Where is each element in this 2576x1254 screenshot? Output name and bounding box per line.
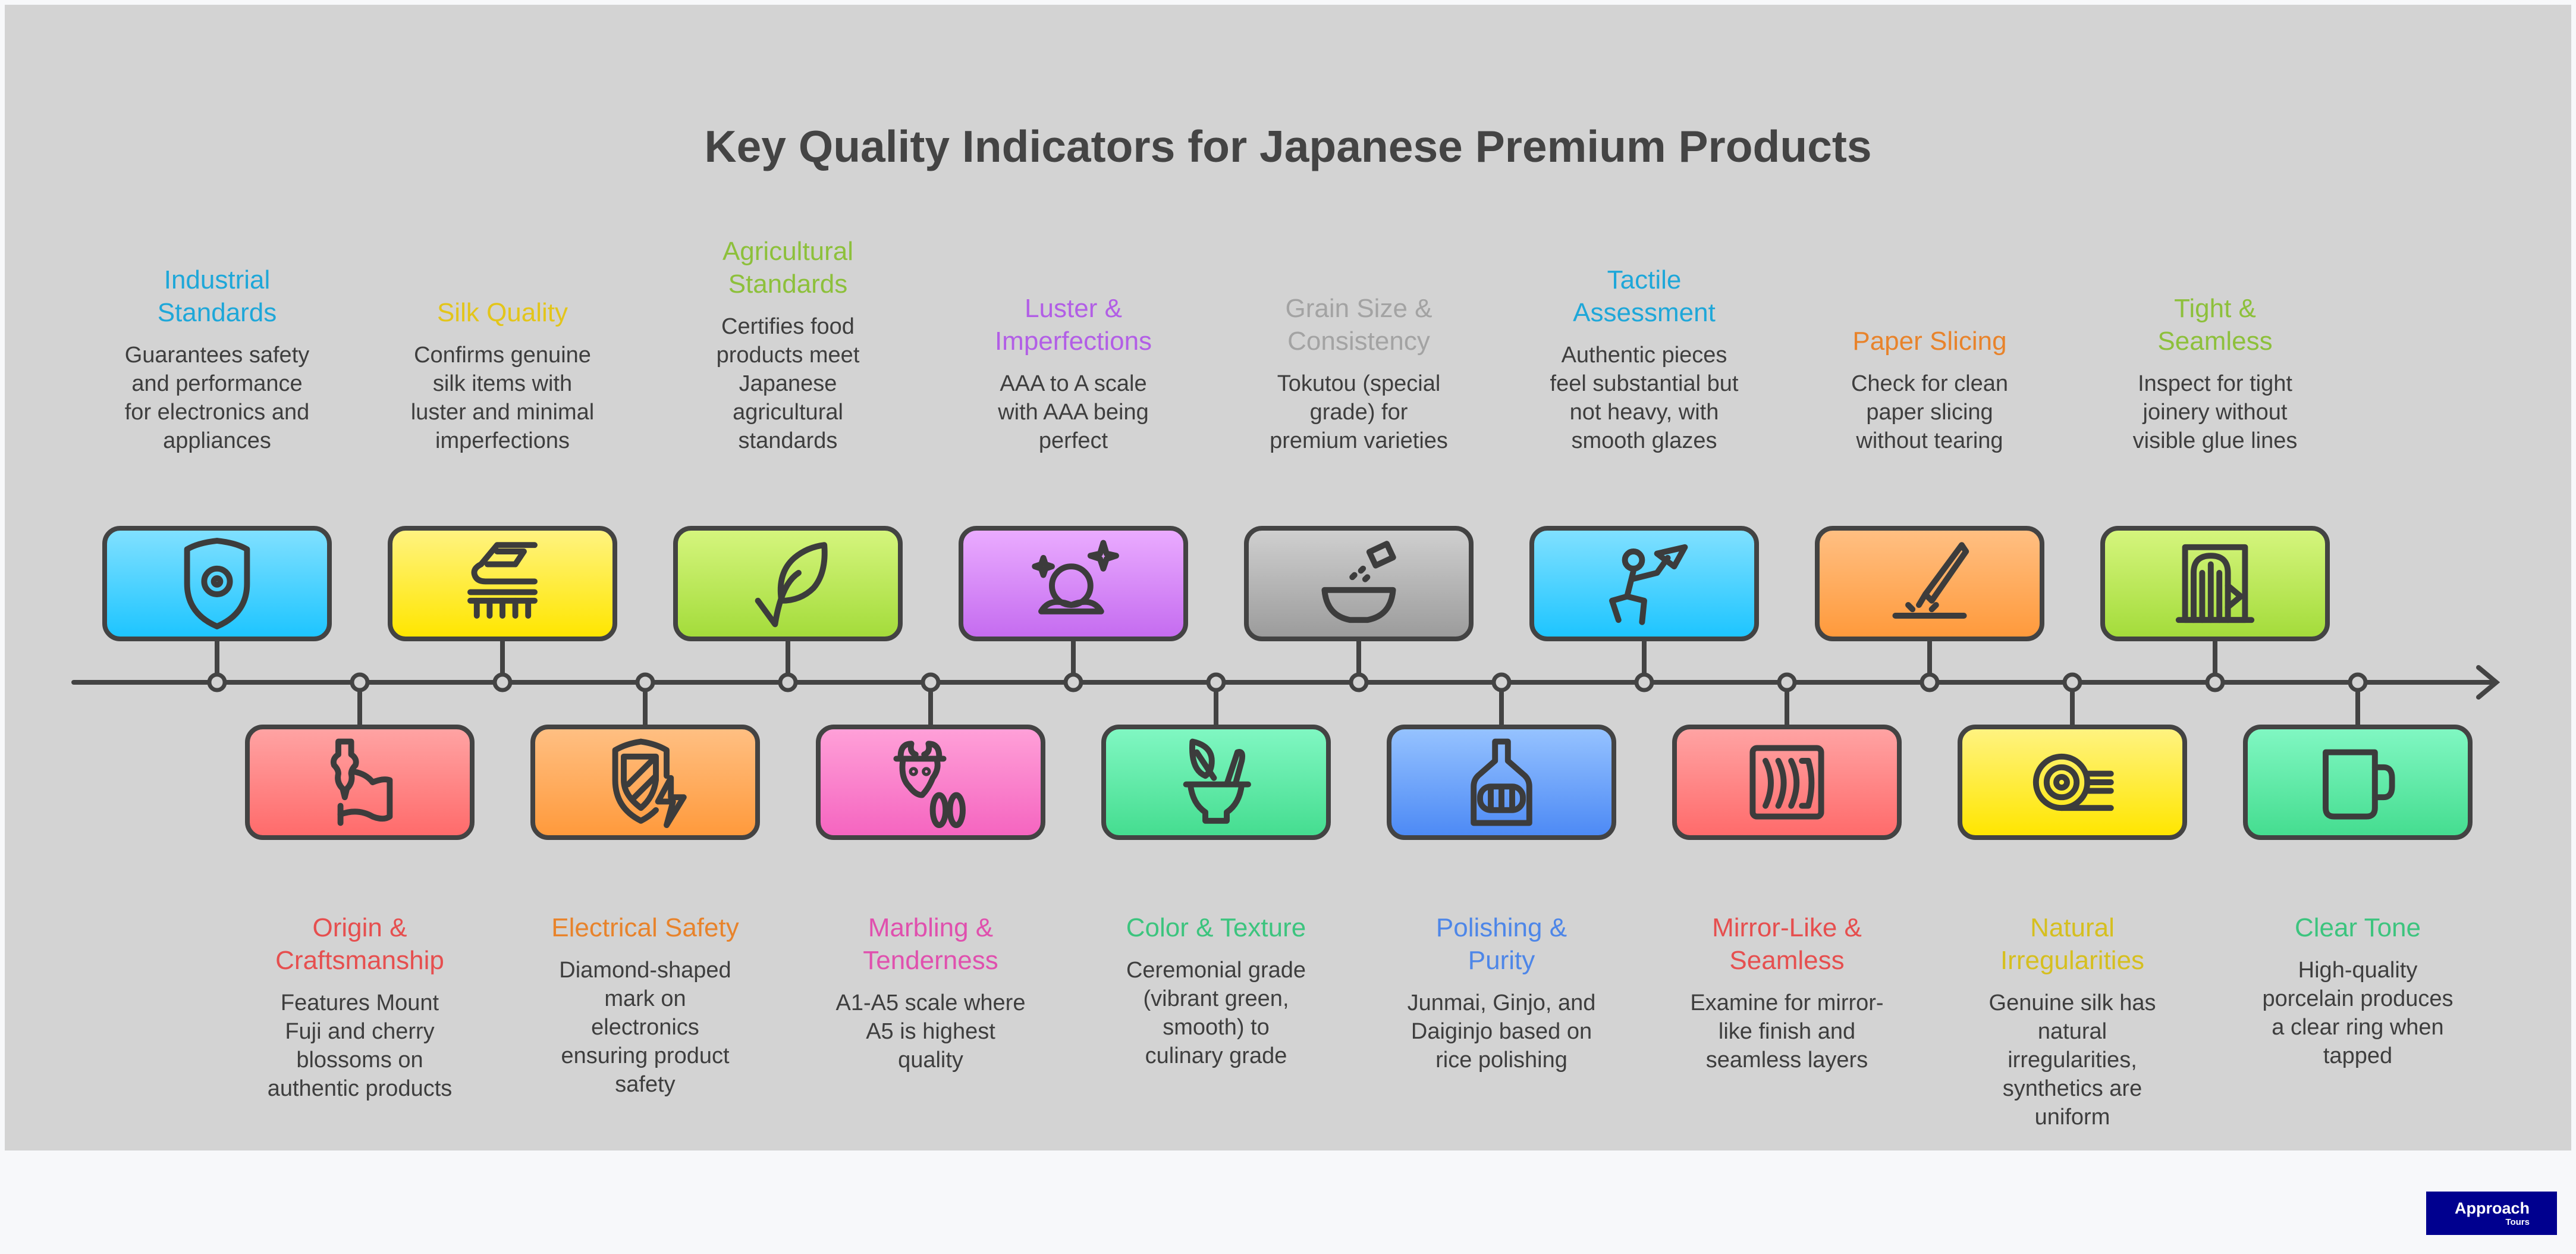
text: tight & seamless: Inspect for tight xyxy=(2138,371,2292,396)
text: industrial standards: Guarantees safety xyxy=(125,343,309,368)
text: agricultural standards xyxy=(717,237,860,453)
text: natural irregularities: Genuine silk has xyxy=(1989,990,2156,1015)
text: origin & craftsmanship: blossoms on xyxy=(296,1048,423,1073)
text: electrical safety: Electrical Safety xyxy=(551,913,739,942)
text: silk quality: luster and minimal xyxy=(411,400,594,425)
text: luster & imperfections: AAA to A scale xyxy=(1000,371,1147,396)
text: mirror-like & seamless: Examine for mirror- xyxy=(1690,990,1884,1015)
text: origin & craftsmanship xyxy=(268,913,452,1101)
logo: Tours xyxy=(2505,1217,2530,1227)
text: mirror-like & seamless: like finish and xyxy=(1719,1019,1855,1044)
icon box: marbling & tenderness xyxy=(816,725,1045,840)
text: grain size: Tokutou (special xyxy=(1277,371,1440,396)
text: tactile assessment: Authentic pieces xyxy=(1562,343,1727,368)
text: agricultural standards: Japanese xyxy=(739,371,837,396)
icon box: tactile assessment xyxy=(1529,526,1759,641)
logo: Approach xyxy=(2455,1199,2530,1217)
text: silk quality: Silk Quality xyxy=(437,298,568,327)
text: polishing & purity xyxy=(1408,913,1595,1073)
text: natural irregularities: irregularities, xyxy=(2008,1048,2137,1073)
text: silk quality: Confirms genuine xyxy=(414,343,591,368)
text: electrical safety: Diamond-shaped xyxy=(559,958,731,983)
text: natural irregularities: synthetics are xyxy=(2003,1076,2142,1101)
text: marbling & tenderness: Tenderness xyxy=(863,946,998,975)
text: marbling & tenderness: quality xyxy=(898,1048,963,1073)
text: paper slicing: Check for clean xyxy=(1851,371,2008,396)
text: luster & imperfections: Imperfections xyxy=(995,327,1152,356)
text: paper slicing xyxy=(1851,327,2008,453)
text: natural irregularities: Irregularities xyxy=(2000,946,2144,975)
icon box: color & texture xyxy=(1101,725,1331,840)
text: polishing & purity: Polishing & xyxy=(1436,913,1567,942)
text: industrial standards: and performance xyxy=(131,371,303,396)
text: electrical safety xyxy=(551,913,739,1097)
text: grain size: Consistency xyxy=(1287,327,1430,356)
text: clear tone: porcelain produces xyxy=(2262,986,2454,1011)
icon box: luster & imperfections xyxy=(959,526,1188,641)
icon box: mirror-like xyxy=(1672,725,1902,840)
text: electrical safety: ensuring product xyxy=(561,1043,730,1068)
text: color & texture: Color & Texture xyxy=(1126,913,1306,942)
text: natural irregularities: natural xyxy=(2038,1019,2107,1044)
text: luster & imperfections: Luster & xyxy=(1025,294,1122,323)
text: color & texture xyxy=(1126,913,1306,1068)
text: industrial standards xyxy=(125,265,309,453)
text: origin & craftsmanship: authentic products xyxy=(268,1076,452,1101)
icon box: origin & craftsmanship xyxy=(245,725,475,840)
text: natural irregularities xyxy=(1989,913,2156,1130)
text: paper slicing: paper slicing xyxy=(1866,400,1993,425)
text: origin & craftsmanship: Fuji and cherry xyxy=(285,1019,435,1044)
text: origin & craftsmanship: Craftsmanship xyxy=(275,946,444,975)
text: electrical safety: safety xyxy=(615,1072,676,1097)
text: luster & imperfections: with AAA being xyxy=(998,400,1149,425)
text: origin & craftsmanship: Origin & xyxy=(313,913,407,942)
text: tactile assessment: feel substantial but xyxy=(1550,371,1738,396)
text: tactile assessment xyxy=(1550,265,1739,453)
text: mirror-like & seamless xyxy=(1690,913,1884,1073)
text: origin & craftsmanship: Features Mount xyxy=(281,990,439,1015)
text: color & texture: Ceremonial grade xyxy=(1126,958,1306,983)
text: tactile assessment: Tactile xyxy=(1607,265,1681,294)
text: tactile assessment: Assessment xyxy=(1573,298,1716,327)
text: tactile assessment: smooth glazes xyxy=(1571,428,1717,453)
text: clear tone: tapped xyxy=(2323,1043,2392,1068)
text: grain size xyxy=(1270,294,1448,453)
icon box: polishing & purity xyxy=(1387,725,1616,840)
text: natural irregularities: Natural xyxy=(2030,913,2115,942)
text: color & texture: smooth) to xyxy=(1163,1015,1270,1040)
text: luster & imperfections xyxy=(995,294,1152,453)
text: tight & seamless: Tight & xyxy=(2174,294,2256,323)
text: luster & imperfections: perfect xyxy=(1039,428,1108,453)
text: agricultural standards: standards xyxy=(739,428,837,453)
text: tight & seamless: Seamless xyxy=(2157,327,2273,356)
text: silk quality: silk items with xyxy=(433,371,572,396)
text: tactile assessment: not heavy, with xyxy=(1570,400,1719,425)
text: tight & seamless: joinery without xyxy=(2143,400,2287,425)
logo xyxy=(2426,1192,2557,1235)
text: marbling & tenderness: A1-A5 scale where xyxy=(836,990,1025,1015)
text: agricultural standards: products meet xyxy=(717,343,859,368)
text: industrial standards: appliances xyxy=(163,428,271,453)
text: silk quality: imperfections xyxy=(435,428,570,453)
text: polishing & purity: Purity xyxy=(1468,946,1535,975)
icon box: grain size xyxy=(1244,526,1474,641)
text: silk quality xyxy=(411,298,594,453)
text: tight & seamless: visible glue lines xyxy=(2133,428,2297,453)
icon box: industrial standards xyxy=(102,526,332,641)
text: grain size: premium varieties xyxy=(1270,428,1448,453)
text: marbling & tenderness: Marbling & xyxy=(868,913,993,942)
text: color & texture: (vibrant green, xyxy=(1143,986,1289,1011)
icon box: silk quality xyxy=(388,526,617,641)
text: grain size: grade) for xyxy=(1310,400,1408,425)
text: industrial standards: Standards xyxy=(158,298,277,327)
text: marbling & tenderness xyxy=(836,913,1025,1073)
text: polishing & purity: rice polishing xyxy=(1435,1048,1567,1073)
text: mirror-like & seamless: seamless layers xyxy=(1706,1048,1868,1073)
icon box: electrical safety xyxy=(530,725,760,840)
text: paper slicing: without tearing xyxy=(1856,428,2003,453)
text: agricultural standards: Certifies food xyxy=(721,314,855,339)
text: electrical safety: electronics xyxy=(591,1015,699,1040)
text: paper slicing: Paper Slicing xyxy=(1852,327,2007,356)
text: industrial standards: for electronics and xyxy=(125,400,309,425)
icon box: tight & seamless xyxy=(2100,526,2330,641)
text: color & texture: culinary grade xyxy=(1145,1043,1287,1068)
text: electrical safety: mark on xyxy=(604,986,686,1011)
text: clear tone xyxy=(2262,913,2454,1068)
icon box: clear tone xyxy=(2243,725,2473,840)
text: agricultural standards: Standards xyxy=(728,269,847,299)
icon box: natural irregularities xyxy=(1958,725,2187,840)
title: Key Quality Indicators for Japanese Premium Products xyxy=(704,121,1872,171)
text: clear tone: a clear ring when xyxy=(2272,1015,2444,1040)
text: mirror-like & seamless: Seamless xyxy=(1729,946,1845,975)
text: polishing & purity: Daiginjo based on xyxy=(1411,1019,1592,1044)
text: agricultural standards: Agricultural xyxy=(722,237,853,266)
text: polishing & purity: Junmai, Ginjo, and xyxy=(1408,990,1595,1015)
text: marbling & tenderness: A5 is highest xyxy=(866,1019,995,1044)
text: grain size: Grain Size & xyxy=(1286,294,1432,323)
text: mirror-like & seamless: Mirror-Like & xyxy=(1712,913,1862,942)
text: tight & seamless xyxy=(2132,294,2297,453)
text: clear tone: High-quality xyxy=(2298,958,2417,983)
text: industrial standards: Industrial xyxy=(164,265,270,294)
text: natural irregularities: uniform xyxy=(2035,1105,2110,1130)
icon box: agricultural standards xyxy=(673,526,903,641)
icon box: paper slicing xyxy=(1815,526,2044,641)
text: agricultural standards: agricultural xyxy=(733,400,843,425)
text: clear tone: Clear Tone xyxy=(2295,913,2421,942)
